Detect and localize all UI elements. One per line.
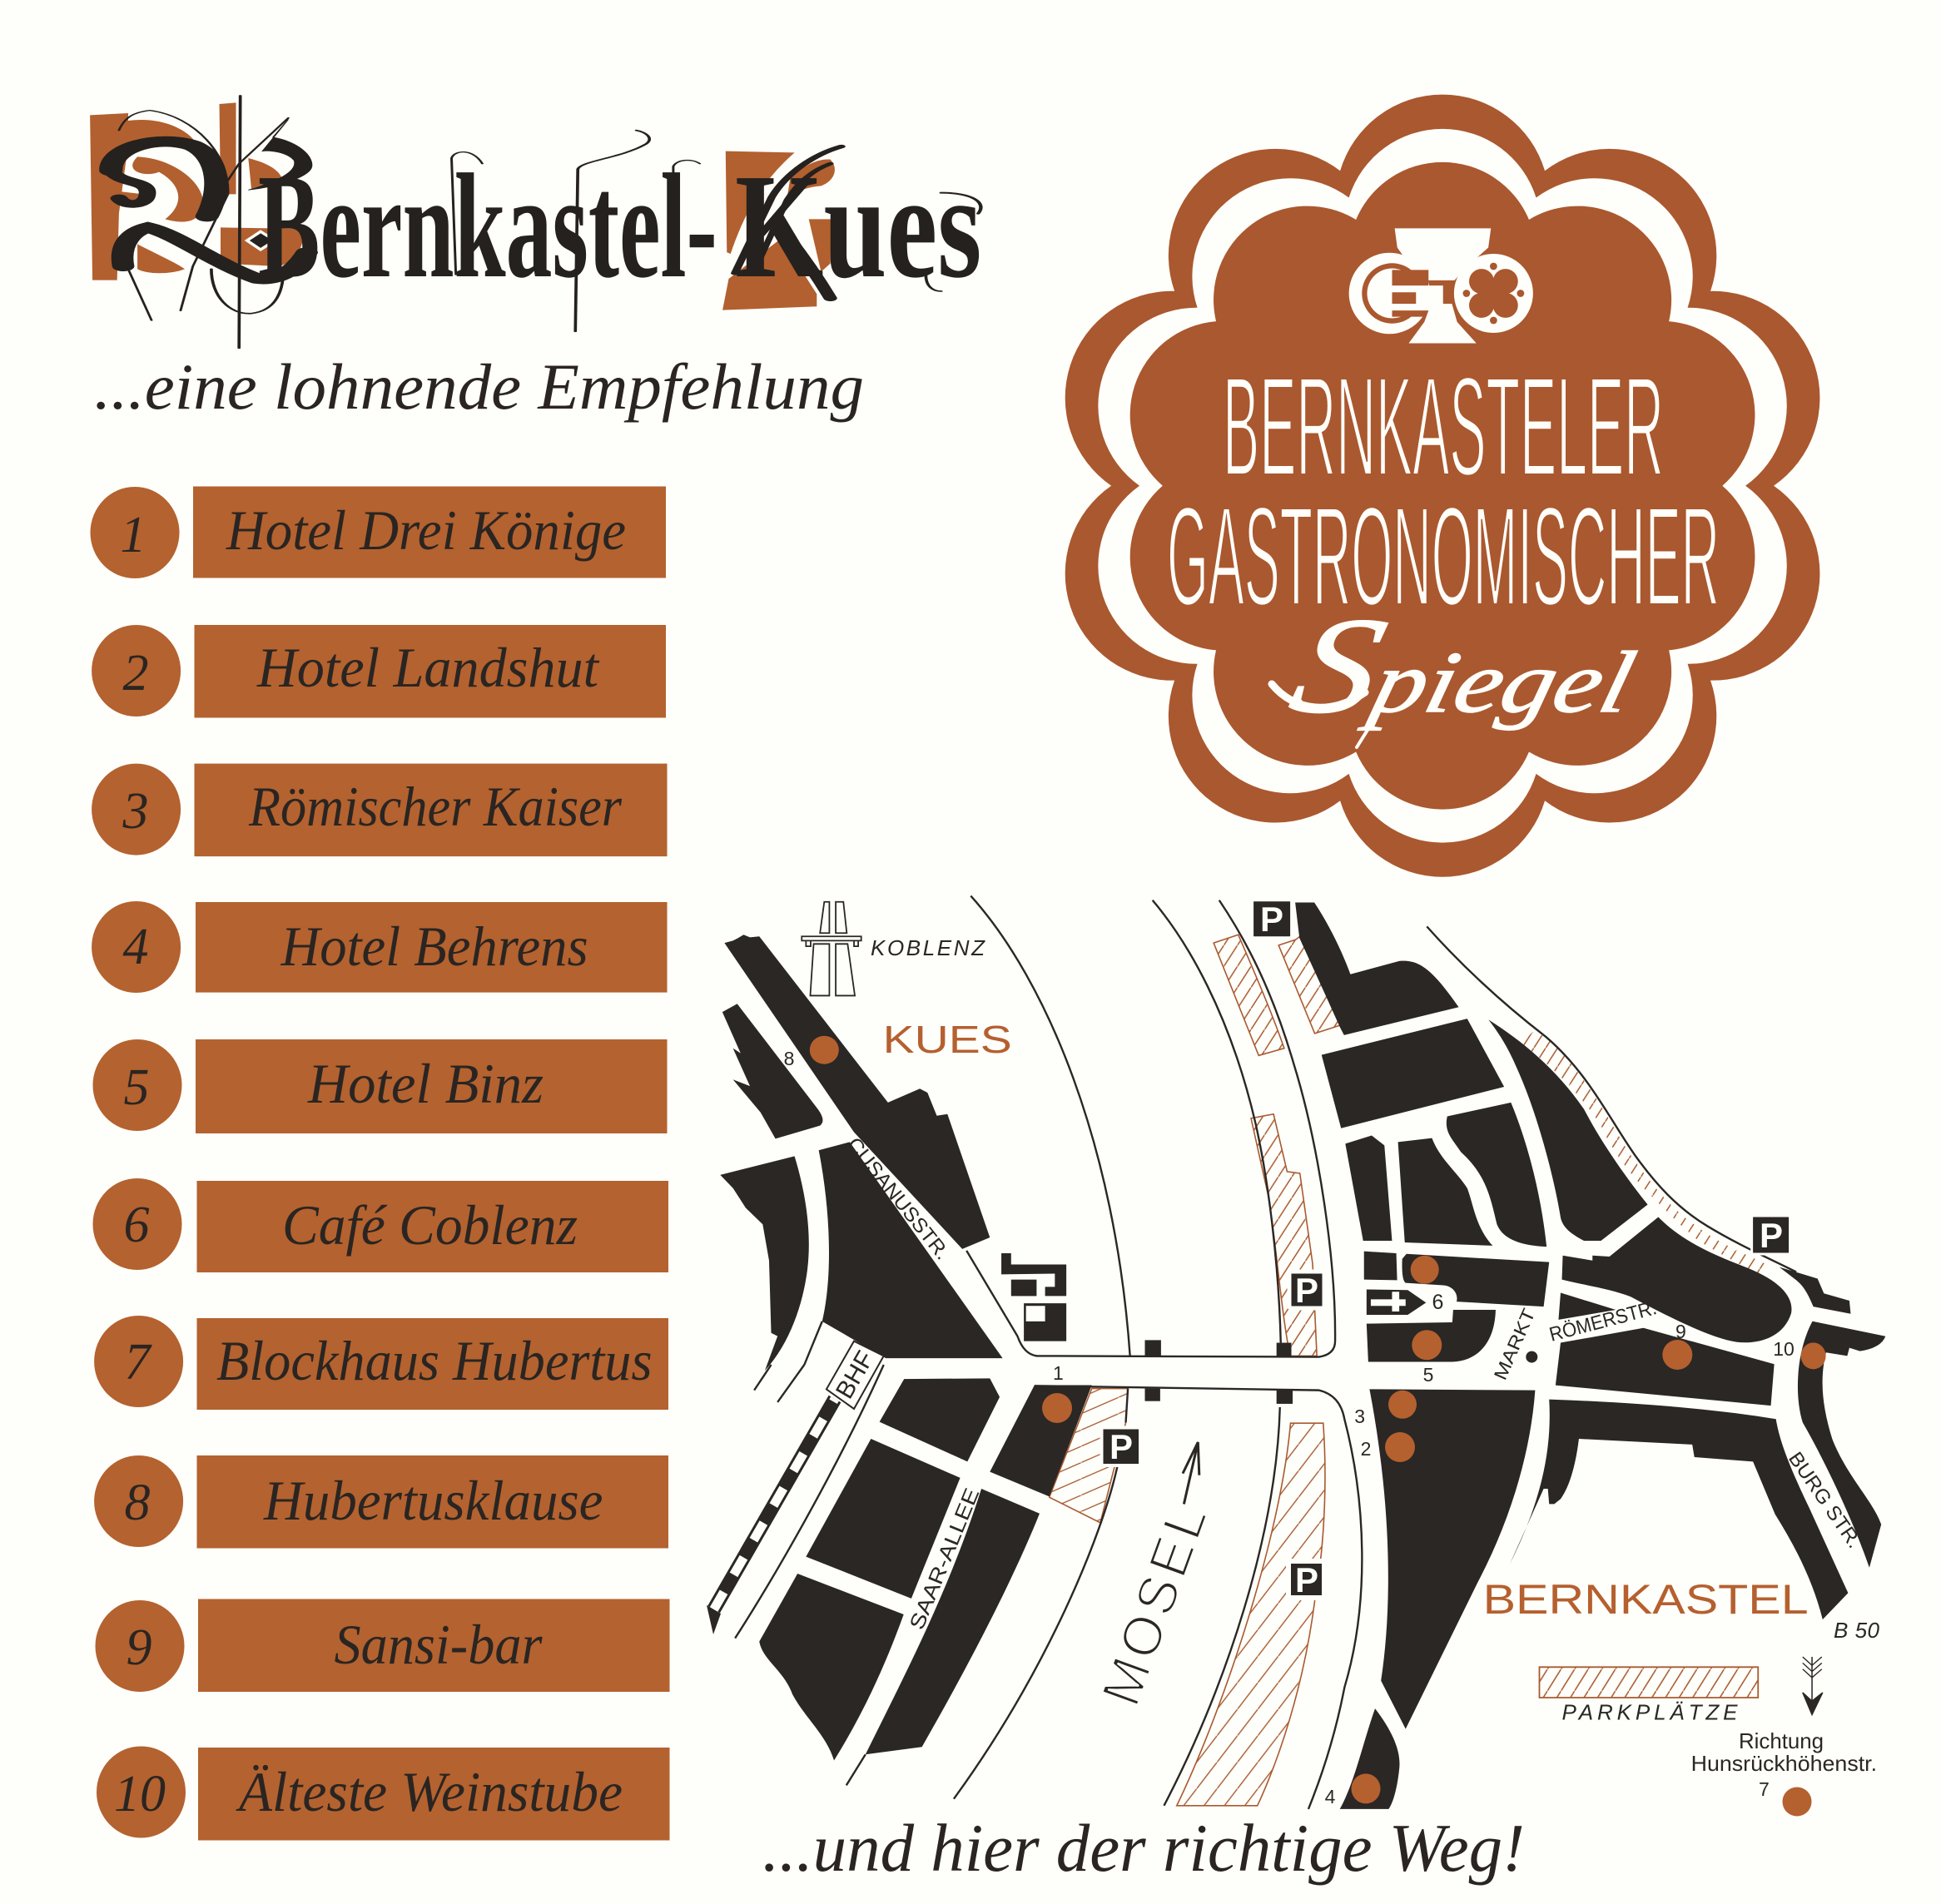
tagline bottom: ...und hier der richtige Weg! — [762, 1810, 1525, 1886]
place names: KUES — [883, 1018, 1012, 1061]
place names: KOBLENZ — [871, 935, 985, 960]
row 9: Sansi-bar — [335, 1613, 543, 1676]
row 8: Hubertusklause — [263, 1469, 603, 1532]
place names: SAAR-ALLEE — [905, 1485, 984, 1633]
title: Bernkastel-Kues — [90, 96, 981, 348]
place names: BURG STR. — [1784, 1448, 1866, 1553]
row 10: Älteste Weinstube — [236, 1760, 623, 1823]
row 1: Hotel Drei Könige — [226, 498, 626, 562]
map location dots — [810, 1036, 1826, 1816]
map dot numbers: 2 — [1361, 1438, 1371, 1460]
row 2: 2 — [123, 645, 148, 702]
tagline top: ...eine lohnende Empfehlung — [94, 350, 864, 423]
row 6: Café Coblenz — [282, 1193, 578, 1257]
map dot numbers: 3 — [1354, 1406, 1365, 1427]
map dot numbers: 10 — [1773, 1338, 1795, 1360]
P markers: P — [1109, 1427, 1133, 1466]
map dot numbers: 1 — [1053, 1362, 1064, 1384]
map left lower section — [735, 1365, 1362, 1809]
row 2 — [92, 625, 666, 717]
map dot numbers: 9 — [1675, 1321, 1686, 1342]
row 6: 6 — [123, 1197, 150, 1253]
row 5: 5 — [123, 1059, 150, 1116]
row 6 — [93, 1178, 668, 1272]
row 5: Hotel Binz — [307, 1052, 544, 1115]
place names: CUSANUSSTR. — [842, 1133, 954, 1264]
row 1 — [90, 486, 666, 578]
row 8 — [94, 1455, 668, 1548]
row 4 — [92, 901, 668, 993]
icon: goblet and key — [1349, 228, 1533, 343]
icon: church arrow — [1367, 1290, 1426, 1315]
logo: scalloped badge — [1065, 95, 1819, 877]
map dot numbers: 4 — [1325, 1786, 1336, 1807]
row 4: Hotel Behrens — [280, 915, 588, 978]
place names: RÖMERSTR. — [1547, 1297, 1659, 1346]
row 9 — [95, 1599, 669, 1692]
row 7: 7 — [125, 1334, 153, 1391]
map dot numbers: 6 — [1432, 1291, 1443, 1314]
place names: MARKT — [1490, 1306, 1540, 1383]
logo: scalloped badge: Spiegel — [1278, 589, 1655, 741]
P markers — [1102, 900, 1790, 1599]
Spiegel swash — [1272, 684, 1382, 747]
P markers: P — [1295, 1560, 1318, 1599]
map dot numbers: 7 — [1759, 1778, 1770, 1800]
map left upper section — [720, 896, 1340, 1371]
map dot numbers — [784, 1048, 1795, 1807]
place names — [842, 935, 1880, 1776]
title: Bernkastel-Kues: Kues — [735, 143, 981, 309]
row 1: 1 — [120, 507, 146, 563]
title ornament: brown patches — [90, 102, 835, 310]
map — [707, 896, 1885, 1816]
place names: MOSEL — [1090, 1497, 1219, 1713]
map right lower section — [1340, 1321, 1885, 1809]
P markers: P — [1295, 1271, 1318, 1310]
place names: B 50 — [1834, 1618, 1880, 1643]
place names: Hunsrückhöhenstr. — [1691, 1751, 1877, 1776]
row 3: Römischer Kaiser — [248, 775, 622, 838]
row 2: Hotel Landshut — [256, 636, 600, 699]
row 3: 3 — [122, 783, 148, 840]
P markers: P — [1760, 1216, 1783, 1255]
map dot numbers: 5 — [1423, 1364, 1433, 1386]
map right upper section — [1295, 903, 1850, 1406]
row 9: 9 — [127, 1619, 151, 1676]
icon: direction arrow — [1803, 1657, 1823, 1714]
BHF station label: BHF — [831, 1346, 880, 1403]
railway line — [707, 1399, 835, 1634]
row 3 — [92, 764, 668, 856]
row 4: 4 — [123, 919, 148, 975]
icon: autobahn — [802, 902, 861, 995]
place names: BERNKASTEL — [1483, 1576, 1809, 1623]
place names: Richtung — [1739, 1728, 1824, 1753]
row 7: Blockhaus Hubertus — [216, 1329, 653, 1392]
row 5 — [93, 1039, 668, 1133]
P markers: P — [1260, 900, 1283, 939]
badge shape — [1065, 95, 1819, 877]
row 10: 10 — [114, 1766, 166, 1822]
legend: parking hatch swatch — [1539, 1667, 1758, 1698]
row 10 — [97, 1746, 669, 1841]
list of restaurants — [90, 486, 669, 1841]
title ornament: calligraphic flourishes — [111, 96, 980, 348]
map dot numbers: 8 — [784, 1048, 794, 1069]
row 7 — [94, 1316, 668, 1410]
row 8: 8 — [125, 1475, 150, 1531]
place names: PARKPLÄTZE — [1561, 1700, 1738, 1725]
title text: Bernkastel- — [258, 144, 717, 310]
